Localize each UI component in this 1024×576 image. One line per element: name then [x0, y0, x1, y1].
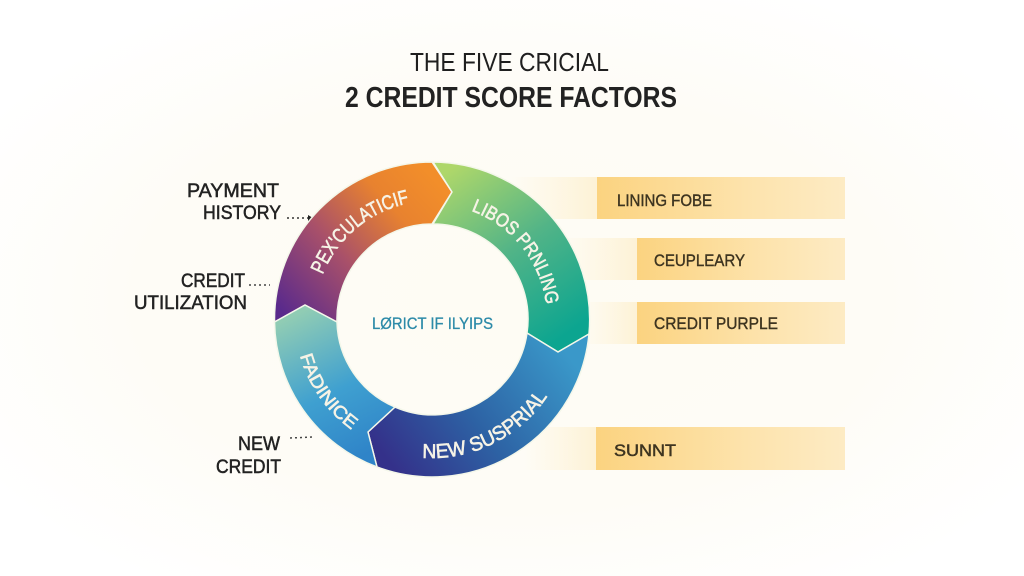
title — [345, 47, 677, 114]
label: new credit — [216, 434, 281, 478]
right bars — [510, 177, 845, 470]
left labels — [134, 181, 281, 478]
label: payment history: HISTORY — [203, 203, 281, 224]
label: credit utilization: UTILIZATION — [134, 293, 247, 314]
title: THE FIVE CRICIAL — [410, 47, 609, 77]
bar: lining fobe: LINING FOBE — [617, 191, 712, 210]
segment: orange purple — [274, 162, 452, 322]
label: credit utilization: CREDIT — [181, 271, 245, 292]
segment: green teal — [433, 162, 590, 352]
segment: light blue — [274, 305, 395, 467]
ring labels — [300, 190, 559, 458]
leader: payment history — [287, 215, 313, 221]
ring label: light blue: FADINICE — [300, 353, 359, 430]
bar: lining fobe — [510, 177, 845, 219]
leader: new credit — [290, 437, 313, 438]
bar: sunnt — [525, 427, 845, 470]
bar: ceupleary: CEUPLEARY — [654, 251, 745, 270]
label: new credit: NEW — [238, 434, 280, 455]
ring chart — [274, 162, 590, 477]
ring label: green: LIBOS PRNLING — [472, 198, 559, 304]
ring label: blue: NEW SUSPRIAL — [424, 394, 548, 458]
title: 2 CREDIT SCORE FACTORS — [345, 82, 677, 114]
label: payment history — [187, 181, 281, 224]
label: credit utilization — [134, 271, 247, 314]
bar: credit purple — [580, 302, 845, 344]
center text: LØRICT IF ILYIPS — [372, 314, 493, 333]
bar: sunnt: SUNNT — [614, 441, 676, 460]
segment: blue indigo — [368, 333, 589, 477]
label: new credit: CREDIT — [216, 457, 281, 478]
label: payment history: PAYMENT — [187, 181, 279, 202]
ring label: orange: PEX'CULATICIF — [310, 190, 408, 274]
leader: credit utilization — [249, 284, 270, 286]
bar: credit purple: CREDIT PURPLE — [654, 314, 778, 333]
bar: ceupleary — [560, 238, 845, 280]
